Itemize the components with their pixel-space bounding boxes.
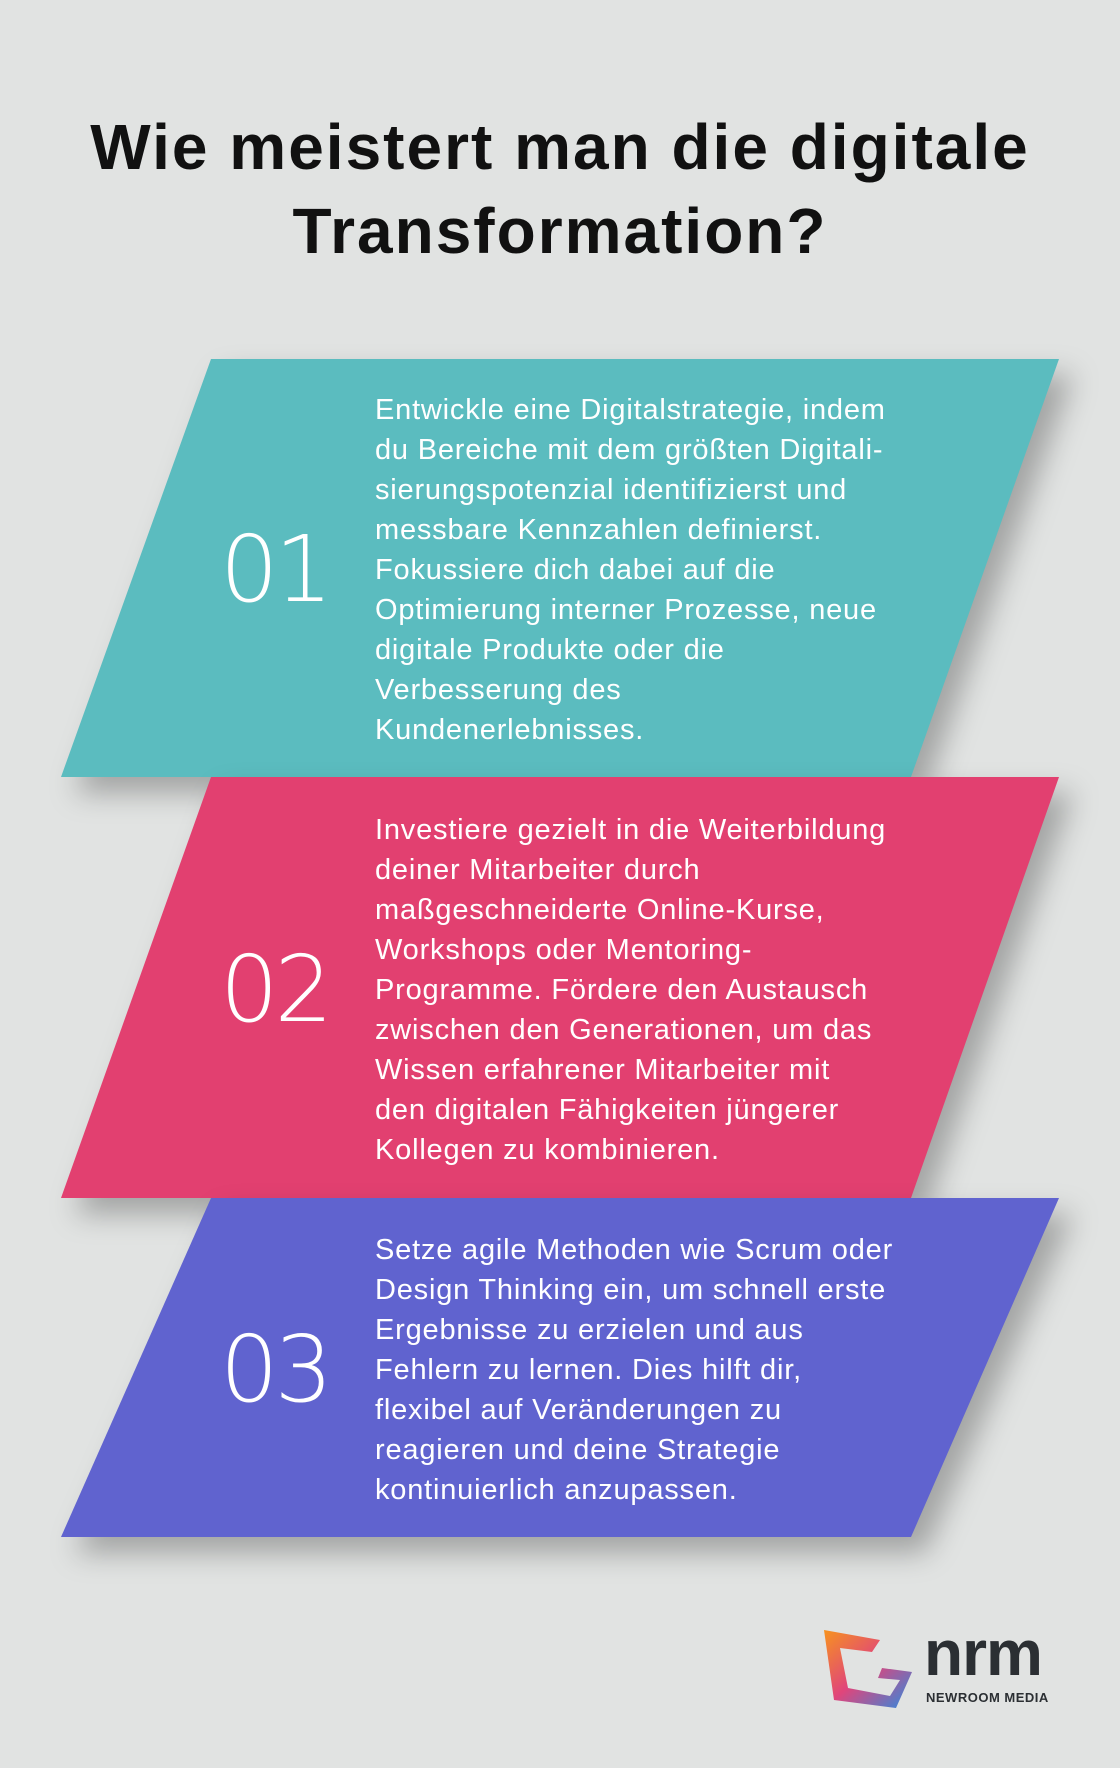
text 2 [375, 814, 886, 1166]
text 1: digitale Produkte oder die [375, 634, 725, 666]
number 01: 01 [220, 516, 329, 623]
title: Wie meistert man die digitale [90, 111, 1030, 183]
panel: step 3 [61, 1198, 1080, 1568]
number 02: 02 [220, 936, 329, 1043]
logo text: nrm [924, 1617, 1042, 1689]
text 1: sierungspotenzial identifizierst und [375, 474, 847, 506]
text 2: zwischen den Generationen, um das [375, 1014, 872, 1046]
text 3 [375, 1234, 893, 1506]
text 2: deiner Mitarbeiter durch [375, 854, 700, 886]
text 2: Programme. Fördere den Austausch [375, 974, 868, 1006]
number 03: 03 [220, 1316, 329, 1423]
text 3: Fehlern zu lernen. Dies hilft dir, [375, 1354, 802, 1386]
title: Transformation? [293, 195, 827, 267]
text 2: Workshops oder Mentoring- [375, 934, 752, 966]
text 1: Verbesserung des [375, 674, 622, 706]
logo: NEWROOM MEDIA [926, 1690, 1049, 1705]
panel: step 2 [61, 777, 1081, 1229]
text 1: messbare Kennzahlen definierst. [375, 514, 822, 546]
text 3: Setze agile Methoden wie Scrum oder [375, 1234, 893, 1266]
text 2: Investiere gezielt in die Weiterbildung [375, 814, 886, 846]
text 1: Optimierung interner Prozesse, neue [375, 594, 877, 626]
text 1: Kundenerlebnisses. [375, 714, 644, 746]
icon: logo mark [824, 1630, 912, 1708]
text 1: Fokussiere dich dabei auf die [375, 554, 775, 586]
text 3: reagieren und deine Strategie [375, 1434, 780, 1466]
text 1: du Bereiche mit dem größten Digitali- [375, 434, 883, 466]
text 3: Design Thinking ein, um schnell erste [375, 1274, 886, 1306]
text 2: den digitalen Fähigkeiten jüngerer [375, 1094, 839, 1126]
text 1: Entwickle eine Digitalstrategie, indem [375, 394, 886, 426]
text 3: flexibel auf Veränderungen zu [375, 1394, 782, 1426]
text 2: Wissen erfahrener Mitarbeiter mit [375, 1054, 830, 1086]
text 2: Kollegen zu kombinieren. [375, 1134, 720, 1166]
text 2: maßgeschneiderte Online-Kurse, [375, 894, 825, 926]
title [90, 111, 1030, 267]
logo [824, 1617, 1049, 1708]
text 1 [375, 394, 886, 746]
text 3: Ergebnisse zu erzielen und aus [375, 1314, 804, 1346]
text 3: kontinuierlich anzupassen. [375, 1474, 738, 1506]
panel: step 1 [61, 359, 1081, 808]
